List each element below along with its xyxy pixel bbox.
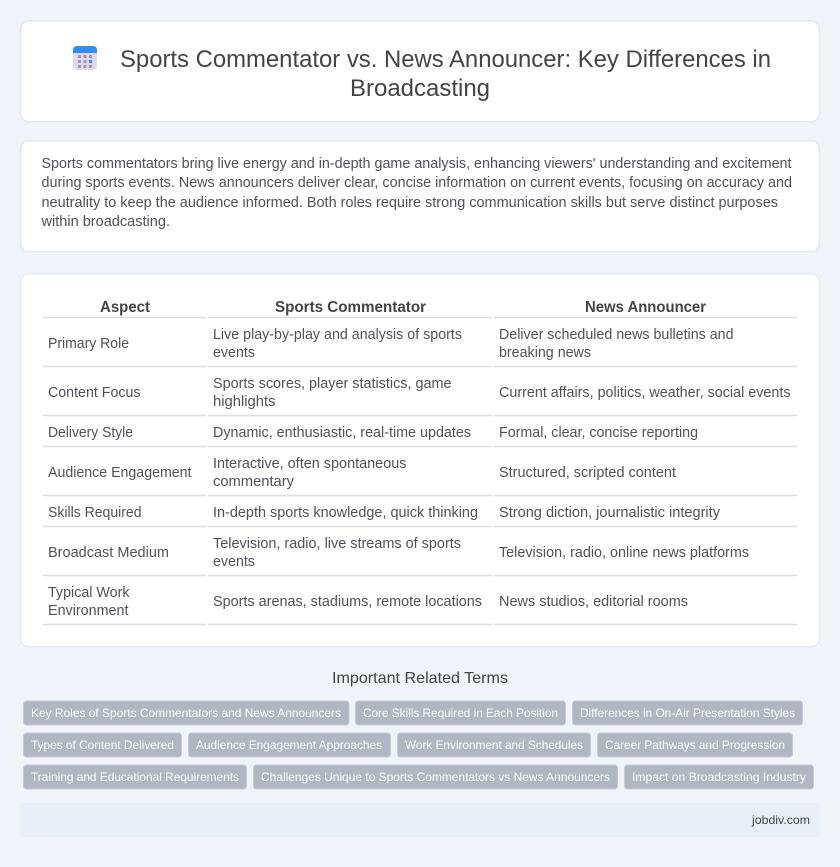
row: typical work environment [48,585,688,619]
row: typical work environment: Sports arenas, stadiums, remote locations [213,594,482,610]
row: audience engagement [48,456,676,490]
row: broadcast medium: events [213,554,255,570]
row: skills required [48,505,721,521]
row: primary role: breaking news [499,345,591,361]
panel: related term tags: Training and Educational Requirements [31,770,239,784]
icon: calendar [73,46,97,70]
panel: related term tags: Impact on Broadcasting Industry [632,770,806,784]
row: content focus: highlights [213,394,276,410]
row: content focus: Content Focus [48,385,140,401]
row: delivery style: Dynamic, enthusiastic, real-time updates [213,425,471,441]
row: delivery style: Formal, clear, concise reporting [499,425,698,441]
panel: related term tags [24,701,814,789]
panel: related term tags: Audience Engagement Approaches [196,738,382,752]
row: primary role: Deliver scheduled news bulletins and [499,327,734,343]
row: delivery style: Delivery Style [48,425,133,441]
row: skills required: Strong diction, journalistic integrity [499,505,721,521]
panel: introduction [21,141,819,252]
panel: related term tags: Key Roles of Sports Commentators and News Announcers [31,706,341,720]
row: primary role: Primary Role [48,336,129,352]
panel: header [21,21,819,122]
text block: introduction: neutrality to keep the audience informed. Both roles require strong communication skills but serve distinct purposes [42,195,778,211]
row: delivery style [48,425,698,441]
row: primary role: events [213,345,255,361]
row: typical work environment: News studios, editorial rooms [499,594,688,610]
title: Sports Commentator vs. News Announcer: Key Differences in [120,46,771,73]
panel: related term tags: Differences in On-Air Presentation Styles [580,706,795,720]
row: broadcast medium [48,536,749,570]
panel: related term tags: Types of Content Delivered [31,738,174,752]
row: broadcast medium: Television, radio, online news platforms [499,545,749,561]
row: content focus: Sports scores, player statistics, game [213,376,452,392]
text block: introduction: within broadcasting. [40,214,170,230]
row: content focus: Current affairs, politics, weather, social events [499,385,790,401]
table header: Aspect [100,299,151,316]
row: skills required: In-depth sports knowledge, quick thinking [213,505,478,521]
row: broadcast medium: Television, radio, live streams of sports [213,536,461,552]
row: primary role [48,327,734,361]
row: audience engagement: commentary [213,474,295,490]
heading: important related terms: Important Related Terms [332,670,508,687]
title [120,46,771,102]
row: audience engagement: Structured, scripted content [499,465,676,481]
row: skills required: Skills Required [48,505,142,521]
row: broadcast medium: Broadcast Medium [48,545,169,561]
panel: related term tags: Challenges Unique to Sports Commentators vs News Announcers [261,770,610,784]
footer [20,803,820,837]
panel: comparison table [21,274,819,647]
panel: related term tags: Core Skills Required in Each Position [363,706,558,720]
text block: introduction: Sports commentators bring live energy and in-depth game analysis, enhancing viewers' understanding and excitement [42,156,792,172]
row: typical work environment: Typical Work [48,585,130,601]
text block: introduction: during sports events. News announcers deliver clear, concise information on current events, focusing on accuracy and [42,175,792,191]
panel: related term tags: Career Pathways and Progression [605,738,785,752]
title: Broadcasting [350,75,490,102]
footer: jobdiv.com [751,813,810,827]
row: primary role: Live play-by-play and analysis of sports [213,327,462,343]
row: content focus [48,376,790,410]
row: typical work environment: Environment [48,603,128,619]
panel: related term tags: Work Environment and Schedules [405,738,583,752]
row: audience engagement: Audience Engagement [48,465,192,481]
table header: Sports Commentator [275,299,426,316]
table header: News Announcer [585,299,706,316]
text block: introduction [40,156,792,230]
table header [100,299,706,316]
row: audience engagement: Interactive, often spontaneous [213,456,406,472]
